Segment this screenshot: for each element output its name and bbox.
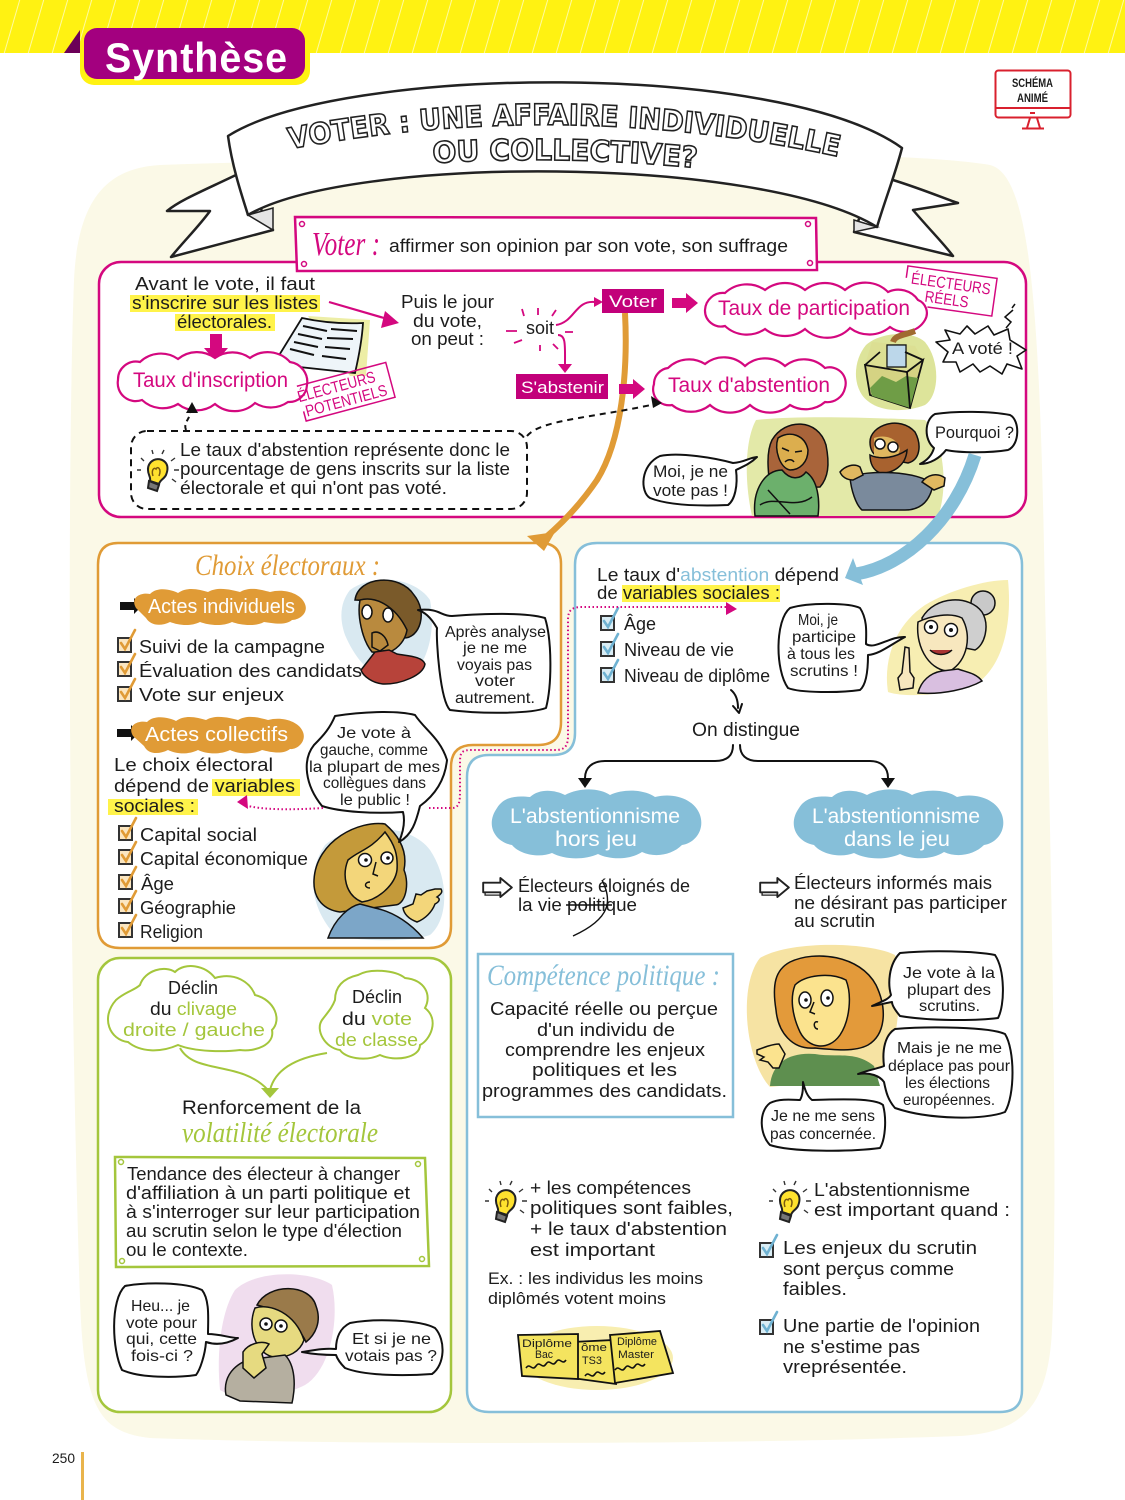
cloud: taux d'abstention xyxy=(653,357,846,413)
speech bubble: je vote à gauche: gauche, comme xyxy=(320,742,428,759)
arrow head: orange to choix électoraux xyxy=(527,532,555,551)
arrow: list to taux d'inscription xyxy=(204,334,228,362)
tag: électeurs potentiels: POTENTIELS xyxy=(304,382,389,421)
speech bubble: je ne me déplace pas: européennes. xyxy=(903,1092,995,1109)
banner right tail xyxy=(854,180,958,256)
cloud: taux d'inscription: Taux d'inscription xyxy=(133,369,288,392)
speech bubble: heu je vote pour qui: Heu... je xyxy=(131,1298,190,1315)
checklist: variables sociales: Géographie xyxy=(140,898,236,918)
checklist: variables sociales: Capital social xyxy=(140,825,257,845)
speech bubble: et si je ne votais pas xyxy=(302,1320,443,1375)
text block: électeurs informés: ne désirant pas participer xyxy=(794,893,1007,913)
heading: Synthèse tab xyxy=(64,28,310,85)
text block: abstentionnisme important quand: Les enjeux du scrutin xyxy=(783,1238,977,1258)
text block: le choix électoral: dépend de variables xyxy=(114,776,295,796)
checklist: variables sociales xyxy=(119,818,308,942)
illustration: woman and man xyxy=(747,417,945,516)
speech bubble: je vote à la plupart: Je vote à la xyxy=(903,965,995,982)
arrow: abstenir to abstention xyxy=(619,379,645,399)
text block: électeurs éloignés xyxy=(483,876,690,936)
text block: abstentionnisme important quand: faibles. xyxy=(783,1279,847,1299)
box: définition volatilité: Tendance des électeur à changer xyxy=(127,1164,400,1184)
speech bubble: je ne me sens pas concernée xyxy=(762,1082,885,1151)
text block: électeurs informés: Électeurs informés mais xyxy=(794,873,992,893)
cloud: déclin du vote: de classe xyxy=(335,1030,418,1050)
illustration: diplomas: Bac xyxy=(535,1349,553,1361)
illustration: diplomas: Diplôme xyxy=(522,1338,572,1350)
box: compétence politique: politiques et les xyxy=(532,1060,677,1080)
checklist: age vie diplome: Niveau de diplôme xyxy=(624,666,770,686)
cloud: abstentionnisme hors jeu: L'abstentionnisme xyxy=(510,805,680,828)
text: on distingue: On distingue xyxy=(692,720,800,741)
woman xyxy=(768,424,828,488)
checklist: variables sociales: Religion xyxy=(140,922,203,942)
tag: électeurs réels: RÉELS xyxy=(924,287,970,312)
checklist: age vie diplome xyxy=(601,608,770,686)
illustration: diplomas: TS3 xyxy=(582,1355,602,1367)
text block: le taux d'abstention dépend: de variables sociales : xyxy=(597,583,780,603)
checklist: actes individuels: Vote sur enjeux xyxy=(139,685,284,705)
text block: abstentionnisme important quand: ne s'estime pas xyxy=(783,1337,920,1357)
panel: pink voter process xyxy=(99,217,1026,537)
text block: le choix électoral xyxy=(108,755,300,816)
speech bubble: je ne me déplace pas xyxy=(858,1027,1012,1118)
cloud: déclin du clivage xyxy=(108,966,277,1051)
cloud: déclin du vote: Déclin xyxy=(352,987,402,1007)
box: compétence politique xyxy=(478,954,733,1117)
callout: dashed abstention definition: pourcentage de gens inscrits sur la liste xyxy=(180,459,510,479)
text block: compétences faibles: + le taux d'abstention xyxy=(530,1219,727,1239)
checklist: variables sociales: Capital économique xyxy=(140,849,308,869)
tag: électeurs réels xyxy=(903,266,997,316)
text block: le choix électoral: sociales : xyxy=(114,796,195,816)
arrow: to election day xyxy=(329,302,384,318)
tag: électeurs réels: ÉLECTEURS xyxy=(910,269,992,299)
speech bubble: je ne me déplace pas: déplace pas pour xyxy=(888,1058,1011,1075)
label: S'abstenir xyxy=(516,374,608,399)
speech bubble: moi je participe: scrutins ! xyxy=(790,663,858,680)
box: définition volatilité xyxy=(115,1157,429,1267)
cloud: abstentionnisme hors jeu: hors jeu xyxy=(555,828,637,851)
label: Voter xyxy=(602,289,664,313)
text: volatilité électorale: volatilité électorale xyxy=(182,1118,378,1149)
icon: light bulb xyxy=(137,450,179,491)
cloud: taux d'inscription xyxy=(118,352,307,411)
box: compétence politique: programmes des candidats. xyxy=(482,1081,727,1101)
box: définition volatilité: à s'interroger sur leur participation xyxy=(126,1202,420,1222)
checklist: actes individuels xyxy=(118,630,362,705)
speech bubble: et si je ne votais pas: votais pas ? xyxy=(345,1348,437,1365)
text block: abstentionnisme important quand: Une partie de l'opinion xyxy=(783,1316,980,1336)
cloud: taux d'abstention: Taux d'abstention xyxy=(668,374,830,397)
checklist: actes individuels: Évaluation des candidats xyxy=(139,661,362,681)
speech bubble: je ne me sens pas concernée: pas concernée. xyxy=(770,1126,876,1143)
text block: compétences faibles: diplômés votent moins xyxy=(488,1289,666,1308)
tag: électeurs potentiels xyxy=(295,362,395,422)
cloud: taux de participation: Taux de participation xyxy=(718,297,910,320)
checklist: variables sociales: Âge xyxy=(141,874,174,894)
speech bubble: pourquoi xyxy=(920,412,1017,464)
speech bubble: je vote à gauche: Je vote à xyxy=(337,725,411,742)
panel: choix électoraux (orange) xyxy=(98,543,561,948)
text block: compétences faibles: politiques sont faibles, xyxy=(530,1198,733,1218)
text block: le taux d'abstention dépend xyxy=(597,565,839,603)
arrow: actes collectifs xyxy=(117,725,139,741)
title text: VOTER : UNE AFFAIRE INDIVIDUELLE xyxy=(285,102,842,158)
arrowheads: dotted connector xyxy=(237,602,737,809)
cloud: déclin du clivage: du clivage xyxy=(150,999,237,1019)
cloud: déclin du vote xyxy=(320,971,433,1059)
checklist: age vie diplome: Âge xyxy=(624,614,656,634)
illustration: curly red-haired woman xyxy=(747,945,899,1087)
box: compétence politique: d'un individu de xyxy=(537,1020,675,1040)
text block: before the vote: Avant le vote, il faut xyxy=(135,274,315,294)
arrow: dashed to taux d'inscription xyxy=(185,402,198,430)
text block: électeurs éloignés: Électeurs éloignés de xyxy=(518,876,690,896)
text block: électeurs informés: au scrutin xyxy=(794,911,875,931)
speech bubble: moi je ne vote pas: Moi, je ne xyxy=(653,462,728,481)
cloud: actes collectifs xyxy=(131,717,304,753)
speech bubble: moi je ne vote pas xyxy=(643,455,757,505)
page marker bar xyxy=(81,1452,84,1500)
checklist: actes individuels: Suivi de la campagne xyxy=(139,637,325,657)
icon: light bulb xyxy=(485,1181,527,1222)
cloud: déclin du clivage: Déclin xyxy=(168,978,218,998)
arrow: soit to s'abstenir xyxy=(558,335,572,373)
text block: compétences faibles: Ex. : les individus les moins xyxy=(488,1269,703,1288)
cloud: abstentionnisme dans le jeu: L'abstentionnisme xyxy=(812,805,980,828)
icon: voter list document xyxy=(278,316,370,376)
text block: before the vote: électorales. xyxy=(177,312,272,332)
callout: dashed abstention definition xyxy=(131,431,527,509)
banner left tail xyxy=(167,174,273,257)
speech bubble: après analyse: voter xyxy=(475,673,516,690)
cloud: actes individuels: Actes individuels xyxy=(148,596,295,618)
illustration: diplomas: Master xyxy=(618,1349,654,1361)
speech bubble: heu je vote pour qui xyxy=(114,1283,238,1377)
speech bubble: moi je participe xyxy=(778,604,905,692)
cloud: taux de participation xyxy=(705,283,927,338)
icon: schéma animé monitor: ANIMÉ xyxy=(1017,90,1048,105)
arrow: to on distingue xyxy=(731,690,742,713)
header band xyxy=(0,0,1125,53)
soit with rays: soit xyxy=(526,318,554,338)
title banner xyxy=(166,81,960,258)
arrow: blue pourquoi to dépend xyxy=(845,455,975,585)
cloud: abstentionnisme hors jeu xyxy=(492,789,701,858)
arrow: soit to voter xyxy=(556,297,603,325)
text block: puis le jour du vote: Puis le jour xyxy=(401,292,494,312)
text block: puis le jour du vote: on peut : xyxy=(411,329,484,349)
title text: OU COLLECTIVE? xyxy=(433,138,698,168)
speech bubble: moi je participe: à tous les xyxy=(787,646,855,663)
icon: light bulb xyxy=(769,1181,811,1222)
text block: abstentionnisme important quand: sont perçus comme xyxy=(783,1259,954,1279)
speech bubble: je ne me déplace pas: Mais je ne me xyxy=(897,1040,1002,1057)
box: compétence politique: Compétence politique : xyxy=(487,959,720,992)
speech bubble: après analyse: Après analyse xyxy=(445,624,546,641)
callout: a voté xyxy=(936,304,1026,374)
label: S'abstenir: S'abstenir xyxy=(521,378,604,397)
callout: a voté: A voté ! xyxy=(952,339,1013,358)
dotted connector: variables sociales links xyxy=(244,607,728,809)
speech bubble: pourquoi: Pourquoi ? xyxy=(935,423,1014,442)
definition box: Voter: Voter : xyxy=(312,226,380,263)
arrow: orange voter to choix électoraux xyxy=(546,313,626,537)
speech bubble: moi je participe: Moi, je xyxy=(798,612,838,629)
text block: le taux d'abstention dépend: Le taux d' abstention dépend xyxy=(597,565,839,585)
text block: abstentionnisme important quand: est important quand : xyxy=(814,1200,1010,1220)
heading: choix électoraux: Choix électoraux : xyxy=(195,549,380,582)
checklist: age vie diplome: Niveau de vie xyxy=(624,640,734,660)
arrow: actes individuels xyxy=(120,598,142,614)
icon: schéma animé monitor: SCHÉMA xyxy=(1012,75,1053,90)
background cream blob xyxy=(70,154,1054,1443)
box: compétence politique: comprendre les enjeux xyxy=(505,1040,705,1060)
speech bubble: heu je vote pour qui: fois-ci ? xyxy=(131,1348,193,1365)
arrow: branch left xyxy=(578,745,733,788)
illustration: diplomas: ôme xyxy=(581,1342,607,1354)
definition box: Voter: affirmer son opinion par son vote, son suffrage xyxy=(389,236,788,256)
arrow: branch right xyxy=(740,745,895,788)
text block: puis le jour du vote xyxy=(401,292,494,349)
text block: puis le jour du vote: du vote, xyxy=(413,311,482,331)
text block: before the vote: s'inscrire sur les listes xyxy=(132,293,318,313)
text block: before the vote xyxy=(130,274,320,332)
illustration: diplomas: Diplôme xyxy=(617,1336,657,1348)
text block: abstentionnisme important quand: vreprésentée. xyxy=(783,1357,907,1377)
speech bubble: je vote à gauche: la plupart de mes xyxy=(309,759,440,776)
callout: dashed abstention definition: électorale et qui n'ont pas voté. xyxy=(180,478,447,498)
cloud: abstentionnisme dans le jeu: dans le jeu xyxy=(844,828,950,851)
icon: schéma animé monitor xyxy=(996,70,1070,128)
text block: électeurs éloignés: la vie politique xyxy=(518,895,637,915)
cloud: actes collectifs: Actes collectifs xyxy=(145,724,288,746)
cloud: déclin du vote: du vote xyxy=(342,1009,412,1029)
heading: Synthèse tab: Synthèse xyxy=(105,34,288,81)
speech bubble: je vote à gauche: le public ! xyxy=(340,792,410,809)
speech bubble: après analyse: autrement. xyxy=(455,690,535,707)
cloud: actes individuels xyxy=(134,589,306,625)
arrow: dashed to taux d'abstention xyxy=(527,396,662,436)
text block: compétences faibles xyxy=(485,1178,733,1308)
tag: électeurs potentiels: ÉLECTEURS xyxy=(295,367,377,406)
speech bubble: après analyse xyxy=(418,610,550,713)
illustration: thinking man xyxy=(341,579,432,684)
speech bubble: je ne me déplace pas: les élections xyxy=(905,1075,990,1092)
label: Voter: Voter xyxy=(609,292,657,311)
illustration: woman with bob xyxy=(313,823,444,940)
box: définition volatilité: au scrutin selon le type d'élection xyxy=(126,1221,402,1241)
speech bubble: heu je vote pour qui: qui, cette xyxy=(126,1331,197,1348)
definition box: Voter xyxy=(295,217,817,271)
speech bubble: après analyse: voyais pas xyxy=(457,657,532,674)
arrows: green merging xyxy=(180,1048,327,1098)
text block: le choix électoral: Le choix électoral xyxy=(114,755,273,775)
speech bubble: moi je participe: participe xyxy=(792,629,856,646)
banner folds xyxy=(248,208,877,232)
text block: électeurs informés xyxy=(760,873,1007,931)
text: renforcement: Renforcement de la xyxy=(182,1098,361,1119)
speech bubble: je vote à la plupart: scrutins. xyxy=(919,998,980,1015)
illustration: diplomas xyxy=(518,1326,673,1390)
text block: abstentionnisme important quand: L'abstentionnisme xyxy=(814,1180,970,1200)
illustration: hesitant man xyxy=(219,1274,335,1403)
box: définition volatilité: ou le contexte. xyxy=(126,1240,248,1260)
illustration: grandmother xyxy=(887,580,1009,695)
panel: volatilité (green) xyxy=(98,958,451,1412)
speech bubble: je vote à la plupart xyxy=(872,951,1003,1020)
soit with rays xyxy=(506,308,573,351)
speech bubble: heu je vote pour qui: vote pour xyxy=(126,1315,198,1332)
speech bubble: je ne me sens pas concernée: Je ne me sens xyxy=(771,1108,875,1125)
panel: abstention (blue) xyxy=(467,543,1022,1412)
cloud: déclin du clivage: droite / gauche xyxy=(123,1020,265,1040)
box: compétence politique: Capacité réelle ou perçue xyxy=(490,999,718,1019)
speech bubble: après analyse: je ne me xyxy=(462,640,527,657)
illustration: ballot box xyxy=(856,331,936,410)
arrow: voter to participation xyxy=(672,293,698,313)
page number: 250 xyxy=(52,1450,75,1466)
banner ribbon xyxy=(228,82,902,227)
speech bubble: je vote à gauche: collègues dans xyxy=(323,775,426,792)
speech bubble: moi je ne vote pas: vote pas ! xyxy=(653,481,728,500)
cloud: abstentionnisme dans le jeu xyxy=(794,789,1003,858)
box: définition volatilité: d'affiliation à un parti politique et xyxy=(126,1183,410,1203)
callout: dashed abstention definition: Le taux d'abstention représente donc le xyxy=(180,440,510,460)
text block: compétences faibles: est important xyxy=(530,1240,655,1260)
speech bubble: je vote à gauche xyxy=(307,712,447,842)
speech bubble: je vote à la plupart: plupart des xyxy=(907,982,991,999)
speech bubble: et si je ne votais pas: Et si je ne xyxy=(352,1331,431,1348)
text block: abstentionnisme important quand xyxy=(760,1180,1010,1377)
text block: compétences faibles: + les compétences xyxy=(530,1178,691,1198)
man xyxy=(870,423,919,463)
